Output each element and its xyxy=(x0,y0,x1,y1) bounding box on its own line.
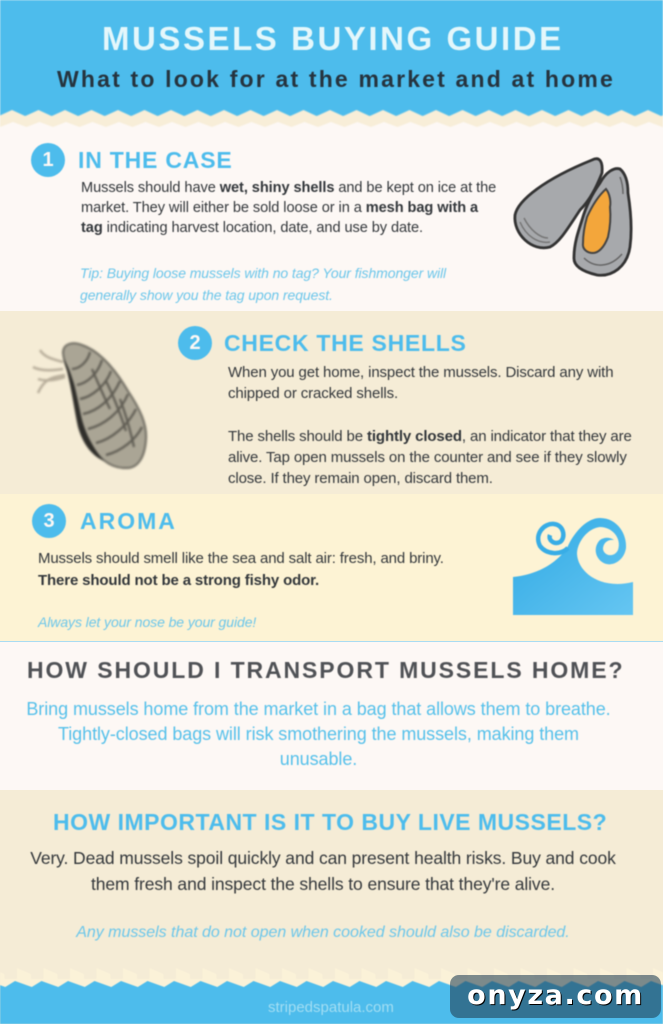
panel: aroma xyxy=(0,494,663,641)
answer text: them fresh and inspect the shells to ensure that they're alive. xyxy=(91,874,555,894)
panel: check the shells xyxy=(0,311,663,494)
answer text xyxy=(30,848,616,894)
step number 1 xyxy=(31,143,65,177)
watermark text: onyza.com xyxy=(467,980,644,1011)
tip: generally show you the tag upon request. xyxy=(80,287,333,303)
body text: The shells should be tightly closed, an indicator that they are xyxy=(228,428,632,445)
icon: mussel with siphons xyxy=(32,340,149,470)
note: Any mussels that do not open when cooked should also be discarded. xyxy=(76,924,570,941)
answer text: Tightly-closed bags will risk smothering the mussels, making them xyxy=(58,724,579,744)
step number 3: 3 xyxy=(43,510,55,532)
heading: HOW IMPORTANT IS IT TO BUY LIVE MUSSELS? xyxy=(53,809,607,835)
body text: When you get home, inspect the mussels. Discard any with xyxy=(228,364,613,381)
panel: transport question xyxy=(0,641,663,790)
step number 1: 1 xyxy=(42,149,54,171)
body text: chipped or cracked shells. xyxy=(228,385,398,402)
step number 2 xyxy=(178,326,212,360)
body text: close. If they remain open, discard them. xyxy=(228,470,493,487)
icon: wave xyxy=(512,517,634,616)
title: MUSSELS BUYING GUIDE xyxy=(102,20,564,57)
body text: alive. Tap open mussels on the counter and see if they slowly xyxy=(228,449,627,466)
step number 3 xyxy=(32,504,66,538)
watermark xyxy=(450,975,661,1018)
icon: open mussel xyxy=(512,156,634,278)
heading: HOW SHOULD I TRANSPORT MUSSELS HOME? xyxy=(27,657,624,683)
heading: in the case: IN THE CASE xyxy=(78,147,232,173)
body text xyxy=(37,550,444,589)
panel: in the case xyxy=(0,128,663,311)
subtitle: What to look for at the market and at home xyxy=(57,66,615,92)
body text: There should not be a strong fishy odor. xyxy=(38,572,319,589)
source credit: stripedspatula.com xyxy=(268,999,394,1016)
panel: live mussels question xyxy=(0,790,663,1024)
heading: check the shells: CHECK THE SHELLS xyxy=(224,330,466,356)
body text xyxy=(80,180,496,236)
answer text xyxy=(26,699,611,769)
body text: market. They will either be sold loose or in a mesh bag with a xyxy=(81,200,478,216)
answer text: Very. Dead mussels spoil quickly and can present health risks. Buy and cook xyxy=(30,848,616,868)
answer text: unusable. xyxy=(280,749,357,769)
step number 2: 2 xyxy=(189,332,201,354)
body text xyxy=(228,364,632,487)
answer text: Bring mussels home from the market in a bag that allows them to breathe. xyxy=(26,699,611,719)
heading: aroma: AROMA xyxy=(80,508,177,534)
body text: Mussels should smell like the sea and salt air: fresh, and briny. xyxy=(38,550,444,567)
body text: tag indicating harvest location, date, and use by date. xyxy=(81,220,423,236)
panel: header xyxy=(0,0,663,127)
body text: Mussels should have wet, shiny shells and be kept on ice at the xyxy=(81,180,496,196)
tip: Tip: Buying loose mussels with no tag? Your fishmonger will xyxy=(80,265,446,281)
panel: footer xyxy=(0,980,663,1024)
tip xyxy=(80,265,447,304)
tip: Always let your nose be your guide! xyxy=(38,614,256,630)
